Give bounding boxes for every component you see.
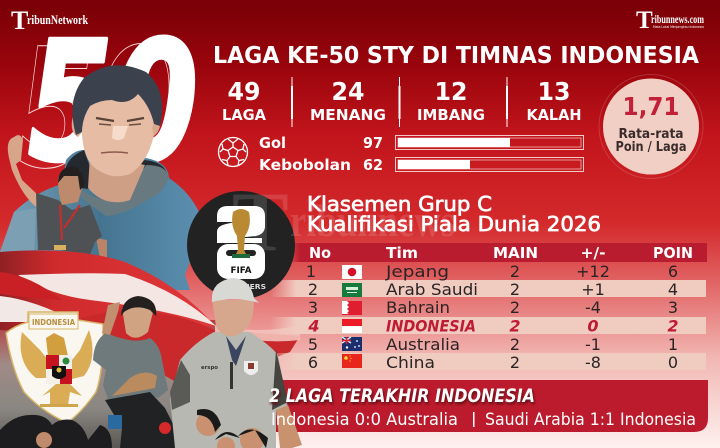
last matches results xyxy=(271,410,696,429)
row texts: 0 xyxy=(668,353,678,372)
callout: average points: Poin / Laga xyxy=(616,140,686,155)
row texts: 3 xyxy=(668,298,678,317)
row texts: +1 xyxy=(581,280,605,299)
goals scored: Gol xyxy=(259,134,286,152)
row texts: China xyxy=(386,353,435,372)
flag: Saudi Arabia xyxy=(342,283,362,297)
big number 50: 50 xyxy=(28,6,198,198)
logo: tribunnews.com: Mata Lokal Menjangkau Indonesia xyxy=(653,25,704,29)
big number 50 outline: 50 xyxy=(18,13,173,205)
watermark: ribunnews xyxy=(290,195,455,246)
logo: Tribun Network xyxy=(11,6,89,35)
goals scored: 97 xyxy=(363,134,383,152)
row texts: INDONESIA xyxy=(386,316,476,336)
table header row: No xyxy=(309,244,331,262)
flag wave background xyxy=(0,250,300,448)
row texts: 1 xyxy=(306,262,316,281)
title: LAGA KE-50 STY DI TIMNAS INDONESIA xyxy=(213,43,699,69)
callout: average points: 1,71 xyxy=(622,92,680,121)
row texts: 6 xyxy=(308,353,318,372)
photo: coach with white cap xyxy=(170,278,302,448)
stat: kalah: KALAH xyxy=(526,106,582,124)
table header row xyxy=(288,243,707,262)
flag: Bahrain xyxy=(342,301,362,315)
photo: coach being lifted xyxy=(93,296,185,448)
stat: menang: MENANG xyxy=(310,106,386,124)
stat: kalah xyxy=(526,77,582,124)
emblem: Garuda Indonesia shield xyxy=(6,312,103,423)
stat: imbang: 12 xyxy=(434,77,468,106)
goals scored xyxy=(259,134,584,152)
row texts: Arab Saudi xyxy=(386,280,478,299)
callout: average points xyxy=(599,74,703,178)
stat: laga: LAGA xyxy=(222,106,266,124)
stat: laga: 49 xyxy=(228,77,260,106)
goals conceded xyxy=(259,156,584,174)
photo: coach with white cap: erspo xyxy=(201,365,218,371)
row texts: 2 xyxy=(667,316,679,336)
stat: laga xyxy=(222,77,266,124)
row texts: 4 xyxy=(307,316,320,336)
table title: Klasemen Grup C xyxy=(307,192,492,216)
row texts: 6 xyxy=(668,262,678,281)
row texts: 3 xyxy=(308,298,318,317)
logo: Tribun Network: T xyxy=(11,6,28,35)
row texts: 5 xyxy=(308,335,318,354)
flag: Japan xyxy=(342,265,362,279)
row texts: 0 xyxy=(587,316,599,336)
goals conceded: 62 xyxy=(363,156,383,174)
goals conceded: Kebobolan xyxy=(259,156,351,174)
stat: imbang: IMBANG xyxy=(417,106,485,124)
flag: Indonesia xyxy=(342,319,362,333)
stat: menang xyxy=(310,77,386,124)
striped rows xyxy=(270,280,706,370)
row texts: -4 xyxy=(585,298,601,317)
row texts: 2 xyxy=(510,335,520,354)
stat: imbang xyxy=(417,77,485,124)
logo: tribunnews.com: T xyxy=(636,7,653,34)
logo: tribunnews.com xyxy=(636,7,704,34)
row texts: 2 xyxy=(509,316,521,336)
row texts xyxy=(306,262,679,372)
table header row: POIN xyxy=(653,244,693,262)
FIFA 26 emblem: FIFA xyxy=(230,266,252,276)
stat: menang: 24 xyxy=(332,77,364,106)
row texts: 2 xyxy=(510,298,520,317)
panel: last two matches xyxy=(268,380,708,432)
crowd at bottom xyxy=(0,409,268,448)
table title: Kualifikasi Piala Dunia 2026 xyxy=(307,212,601,236)
table header row: +/- xyxy=(580,244,606,262)
FIFA 26 emblem: QUALIFIERS xyxy=(216,283,266,291)
emblem: Garuda Indonesia shield: INDONESIA xyxy=(32,318,76,327)
last matches results: Indonesia 0:0 Australia xyxy=(271,410,458,429)
last matches heading: 2 LAGA TERAKHIR INDONESIA xyxy=(269,386,535,407)
row texts: 2 xyxy=(510,280,520,299)
row texts: 2 xyxy=(510,353,520,372)
row texts: +12 xyxy=(576,262,610,281)
photo: coach waving xyxy=(8,135,107,258)
row texts: 4 xyxy=(668,280,678,299)
last matches heading: 2 LAGA TERAKHIR INDONESIA xyxy=(270,388,536,409)
stat: kalah: 13 xyxy=(538,77,570,106)
row texts: -1 xyxy=(585,335,601,354)
row texts: Jepang xyxy=(385,262,449,281)
row texts: -8 xyxy=(585,353,601,372)
table header row: Tim xyxy=(386,244,418,262)
FIFA 26 emblem xyxy=(187,191,295,299)
row texts: 1 xyxy=(668,335,678,354)
last matches results: Saudi Arabia 1:1 Indonesia xyxy=(485,410,696,429)
row texts: Bahrain xyxy=(386,298,450,317)
icon: soccer ball xyxy=(218,138,248,166)
photo: main coach portrait xyxy=(0,65,200,290)
panel: league table xyxy=(270,192,707,372)
table header row: MAIN xyxy=(493,244,538,262)
watermark xyxy=(232,175,455,269)
row texts: Australia xyxy=(386,335,460,354)
callout: average points: Rata-rata xyxy=(618,127,684,142)
watermark: T xyxy=(232,175,289,269)
row texts: 2 xyxy=(510,262,520,281)
row texts: 2 xyxy=(308,280,318,299)
table title xyxy=(307,192,601,236)
flag: China xyxy=(342,354,362,368)
flag: Australia xyxy=(342,337,362,351)
logo: Tribun Network: ribunNetwork xyxy=(27,12,89,27)
